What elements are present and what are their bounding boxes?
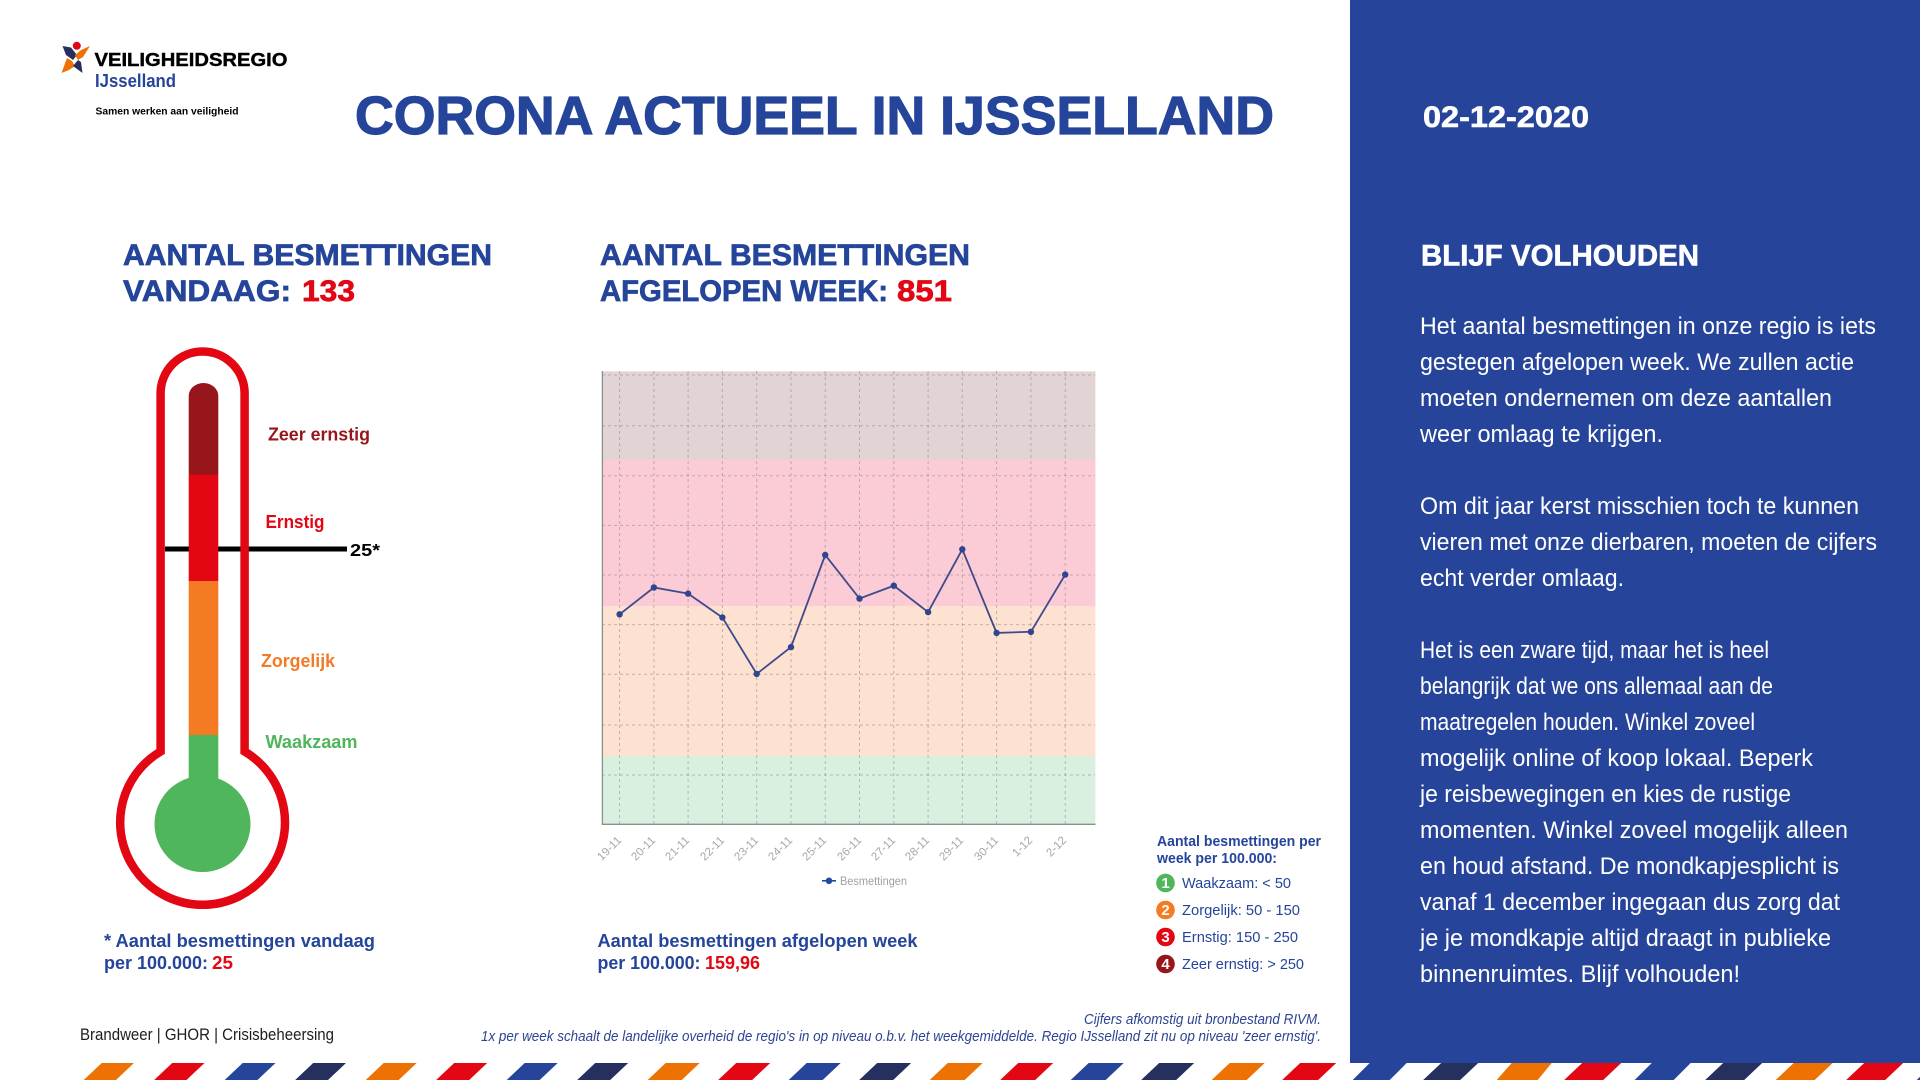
sidebar body text: Het aantal besmettingen in onze regio is iets [1420, 313, 1876, 340]
sidebar body text: vanaf 1 december ingegaan dus zorg dat [1420, 889, 1840, 916]
footer: source note: 1x per week schaalt de landelijke overheid de regio's in op niveau o.b.v. het weekgemiddelde. Regio IJsselland zit nu op niveau 'zeer ernstig'. [481, 1029, 1321, 1045]
sidebar body text: Het is een zware tijd, maar het is heel [1420, 637, 1769, 664]
sidebar body text: je reisbewegingen en kies de rustige [1419, 781, 1791, 808]
footer: organisations: Brandweer | GHOR | Crisisbeheersing [80, 1025, 334, 1044]
x-axis labels: 30-11 [972, 835, 1001, 863]
x-axis labels: 2-12 [1044, 835, 1069, 859]
legend: infections per week per 100.000 [1156, 833, 1321, 973]
label: zorgelijk: Zorgelijk [261, 651, 336, 671]
line chart: infections past two weeks [595, 371, 1096, 888]
logo: Veiligheidsregio IJsselland [62, 42, 288, 117]
date: 02-12-2020 [1423, 101, 1589, 134]
legend item 1: Waakzaam: < 50 [1182, 875, 1291, 892]
note: infections past week per 100.000: Aantal besmettingen afgelopen week [598, 931, 918, 951]
x-axis labels: 1-12 [1010, 835, 1035, 859]
footer: source note [481, 1012, 1321, 1045]
x-axis labels: 27-11 [869, 835, 898, 863]
label: waakzaam: Waakzaam [266, 732, 358, 752]
legend heading: Aantal besmettingen per [1157, 833, 1321, 850]
label: 25 marker: 25* [350, 540, 380, 560]
note: infections past week per 100.000 [598, 931, 918, 973]
panel: right blue sidebar [1350, 0, 1920, 1063]
sidebar body text: vieren met onze dierbaren, moeten de cijfers [1420, 529, 1877, 556]
note: infections past week per 100.000: 159,96 [705, 953, 760, 973]
chart legend: Besmettingen [840, 876, 907, 888]
level: zorgelijk [189, 581, 218, 735]
sidebar body text: echt verder omlaag. [1420, 565, 1624, 592]
icon: logo mark [62, 42, 90, 73]
sidebar body text: mogelijk online of koop lokaal. Beperk [1420, 745, 1814, 772]
level: zeer ernstig [189, 383, 218, 474]
sidebar body text: Om dit jaar kerst misschien toch te kunnen [1420, 493, 1859, 520]
note: infections today per 100.000 [104, 931, 375, 973]
label: zeer ernstig: Zeer ernstig [268, 424, 370, 444]
x-axis labels: 24-11 [766, 835, 795, 863]
sidebar body text: en houd afstand. De mondkapjesplicht is [1420, 853, 1839, 880]
heading: infections today [123, 239, 492, 308]
heading: infections past week: AANTAL BESMETTINGEN [600, 239, 970, 272]
x-axis labels [595, 835, 1069, 863]
heading: infections today: AANTAL BESMETTINGEN [123, 239, 492, 272]
footer: source note: Cijfers afkomstig uit bronbestand RIVM. [1084, 1012, 1321, 1028]
title: CORONA ACTUEEL IN IJSSELLAND [355, 87, 1274, 146]
sidebar body text: je je mondkapje altijd draagt in publieke [1419, 925, 1831, 952]
x-axis labels: 19-11 [595, 835, 624, 863]
sidebar body text: belangrijk dat we ons allemaal aan de [1420, 673, 1773, 700]
decorative airmail stripe band [84, 1062, 1920, 1080]
heading: infections past week: AFGELOPEN WEEK: [600, 275, 888, 308]
legend item 2: Zorgelijk: 50 - 150 [1182, 902, 1300, 919]
legend item 3: Ernstig: 150 - 250 [1182, 929, 1298, 946]
data line [620, 549, 1065, 674]
legend item 4: 4 [1161, 956, 1170, 973]
legend item 4: Zeer ernstig: > 250 [1182, 956, 1304, 973]
sidebar body text: moeten ondernemen om deze aantallen [1420, 385, 1832, 412]
x-axis labels: 20-11 [629, 835, 658, 863]
level: ernstig [189, 474, 218, 581]
note: infections past week per 100.000: per 100.000: [598, 953, 700, 973]
legend heading: week per 100.000: [1156, 850, 1277, 867]
x-axis labels: 23-11 [732, 835, 761, 863]
x-axis labels: 29-11 [937, 835, 966, 863]
heading: infections past week [600, 239, 970, 308]
x-axis labels: 21-11 [663, 835, 692, 863]
sidebar body text [1419, 313, 1877, 988]
heading: infections today: VANDAAG: [123, 275, 291, 308]
sidebar body text: momenten. Winkel zoveel mogelijk alleen [1420, 817, 1848, 844]
legend item 3: 3 [1161, 929, 1170, 946]
chart bands [602, 371, 1095, 824]
note: infections today per 100.000: 25 [212, 953, 233, 973]
sidebar body text: weer omlaag te krijgen. [1419, 421, 1663, 448]
data points [616, 546, 1068, 677]
logo name: VEILIGHEIDSREGIO [94, 50, 288, 70]
marker line at 25 [165, 546, 347, 552]
logo region: IJsselland [95, 71, 176, 91]
x-axis labels: 28-11 [903, 835, 932, 863]
logo tagline: Samen werken aan veiligheid [96, 106, 238, 118]
level: waakzaam with bulb [154, 735, 250, 872]
x-axis labels: 22-11 [698, 835, 727, 863]
label: ernstig: Ernstig [266, 512, 324, 532]
heading: infections today: 133 [302, 275, 355, 308]
sidebar heading: BLIJF VOLHOUDEN [1421, 240, 1699, 272]
sidebar body text: gestegen afgelopen week. We zullen actie [1420, 349, 1854, 376]
legend heading [1156, 833, 1321, 867]
sidebar body text: maatregelen houden. Winkel zoveel [1420, 709, 1755, 736]
x-axis labels: 25-11 [800, 835, 829, 863]
thermometer [120, 352, 380, 905]
thermometer outline [120, 352, 285, 905]
note: infections today per 100.000: per 100.000: [104, 953, 208, 973]
heading: infections past week: 851 [897, 275, 952, 308]
legend item 1: 1 [1161, 875, 1170, 892]
x-axis labels: 26-11 [835, 835, 864, 863]
sidebar body text: binnenruimtes. Blijf volhouden! [1420, 961, 1740, 988]
note: infections today per 100.000: * Aantal besmettingen vandaag [104, 931, 375, 951]
legend item 2: 2 [1161, 902, 1170, 919]
